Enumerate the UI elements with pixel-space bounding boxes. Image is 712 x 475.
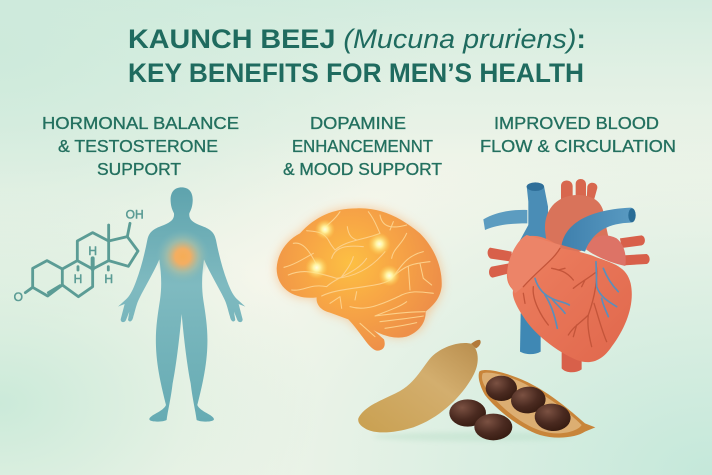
loose seeds: [449, 399, 486, 427]
right atrium: [508, 235, 561, 293]
icon: testosterone molecule: [14, 207, 144, 304]
aortic branches: [561, 179, 597, 200]
icon: glowing brain: [277, 208, 442, 351]
pulmonary trunk: [562, 208, 636, 252]
heading: blood flow: FLOW & CIRCULATION: [480, 136, 676, 156]
superior vena cava: [518, 183, 548, 243]
title: KEY BENEFITS FOR MEN’S HEALTH: [128, 58, 584, 88]
heading: blood flow: IMPROVED BLOOD: [494, 113, 659, 133]
icon: human silhouette: [118, 187, 245, 422]
heading: dopamine: [283, 113, 442, 179]
heading: blood flow: [480, 113, 676, 156]
lower vessels: [520, 313, 541, 354]
shadow: [373, 432, 573, 441]
open pod: [479, 370, 595, 438]
heading: hormonal balance: & TESTOSTERONE: [58, 136, 218, 156]
aortic arch: [545, 195, 608, 257]
left atrium: [586, 235, 626, 266]
icon: testosterone molecule: H: [74, 272, 82, 286]
ventricles: [507, 236, 632, 362]
icon: testosterone molecule: O: [14, 290, 23, 304]
heading: dopamine: & MOOD SUPPORT: [283, 159, 442, 179]
heading: hormonal balance: SUPPORT: [97, 159, 181, 179]
icon: testosterone molecule: H: [88, 244, 97, 258]
heading: dopamine: DOPAMINE: [310, 113, 406, 133]
heading: hormonal balance: [42, 113, 239, 179]
brain folds: [284, 212, 433, 337]
icon: testosterone molecule: OH: [126, 207, 144, 221]
heading: dopamine: ENHANCEMENNT: [292, 136, 433, 156]
icon: testosterone molecule: H: [104, 272, 113, 286]
heading: hormonal balance: HORMONAL BALANCE: [42, 113, 239, 133]
closed pod: [471, 340, 481, 348]
icon: anatomical heart: [483, 179, 650, 372]
glow points: [305, 219, 400, 286]
icon: mucuna pods and seeds: [358, 340, 595, 441]
coronary veins: [535, 262, 618, 328]
title: [128, 24, 586, 88]
title: KAUNCH BEEJ (Mucuna pruriens) :: [128, 24, 586, 54]
coronary arteries: [523, 248, 607, 347]
pulmonary arteries: [488, 235, 650, 278]
